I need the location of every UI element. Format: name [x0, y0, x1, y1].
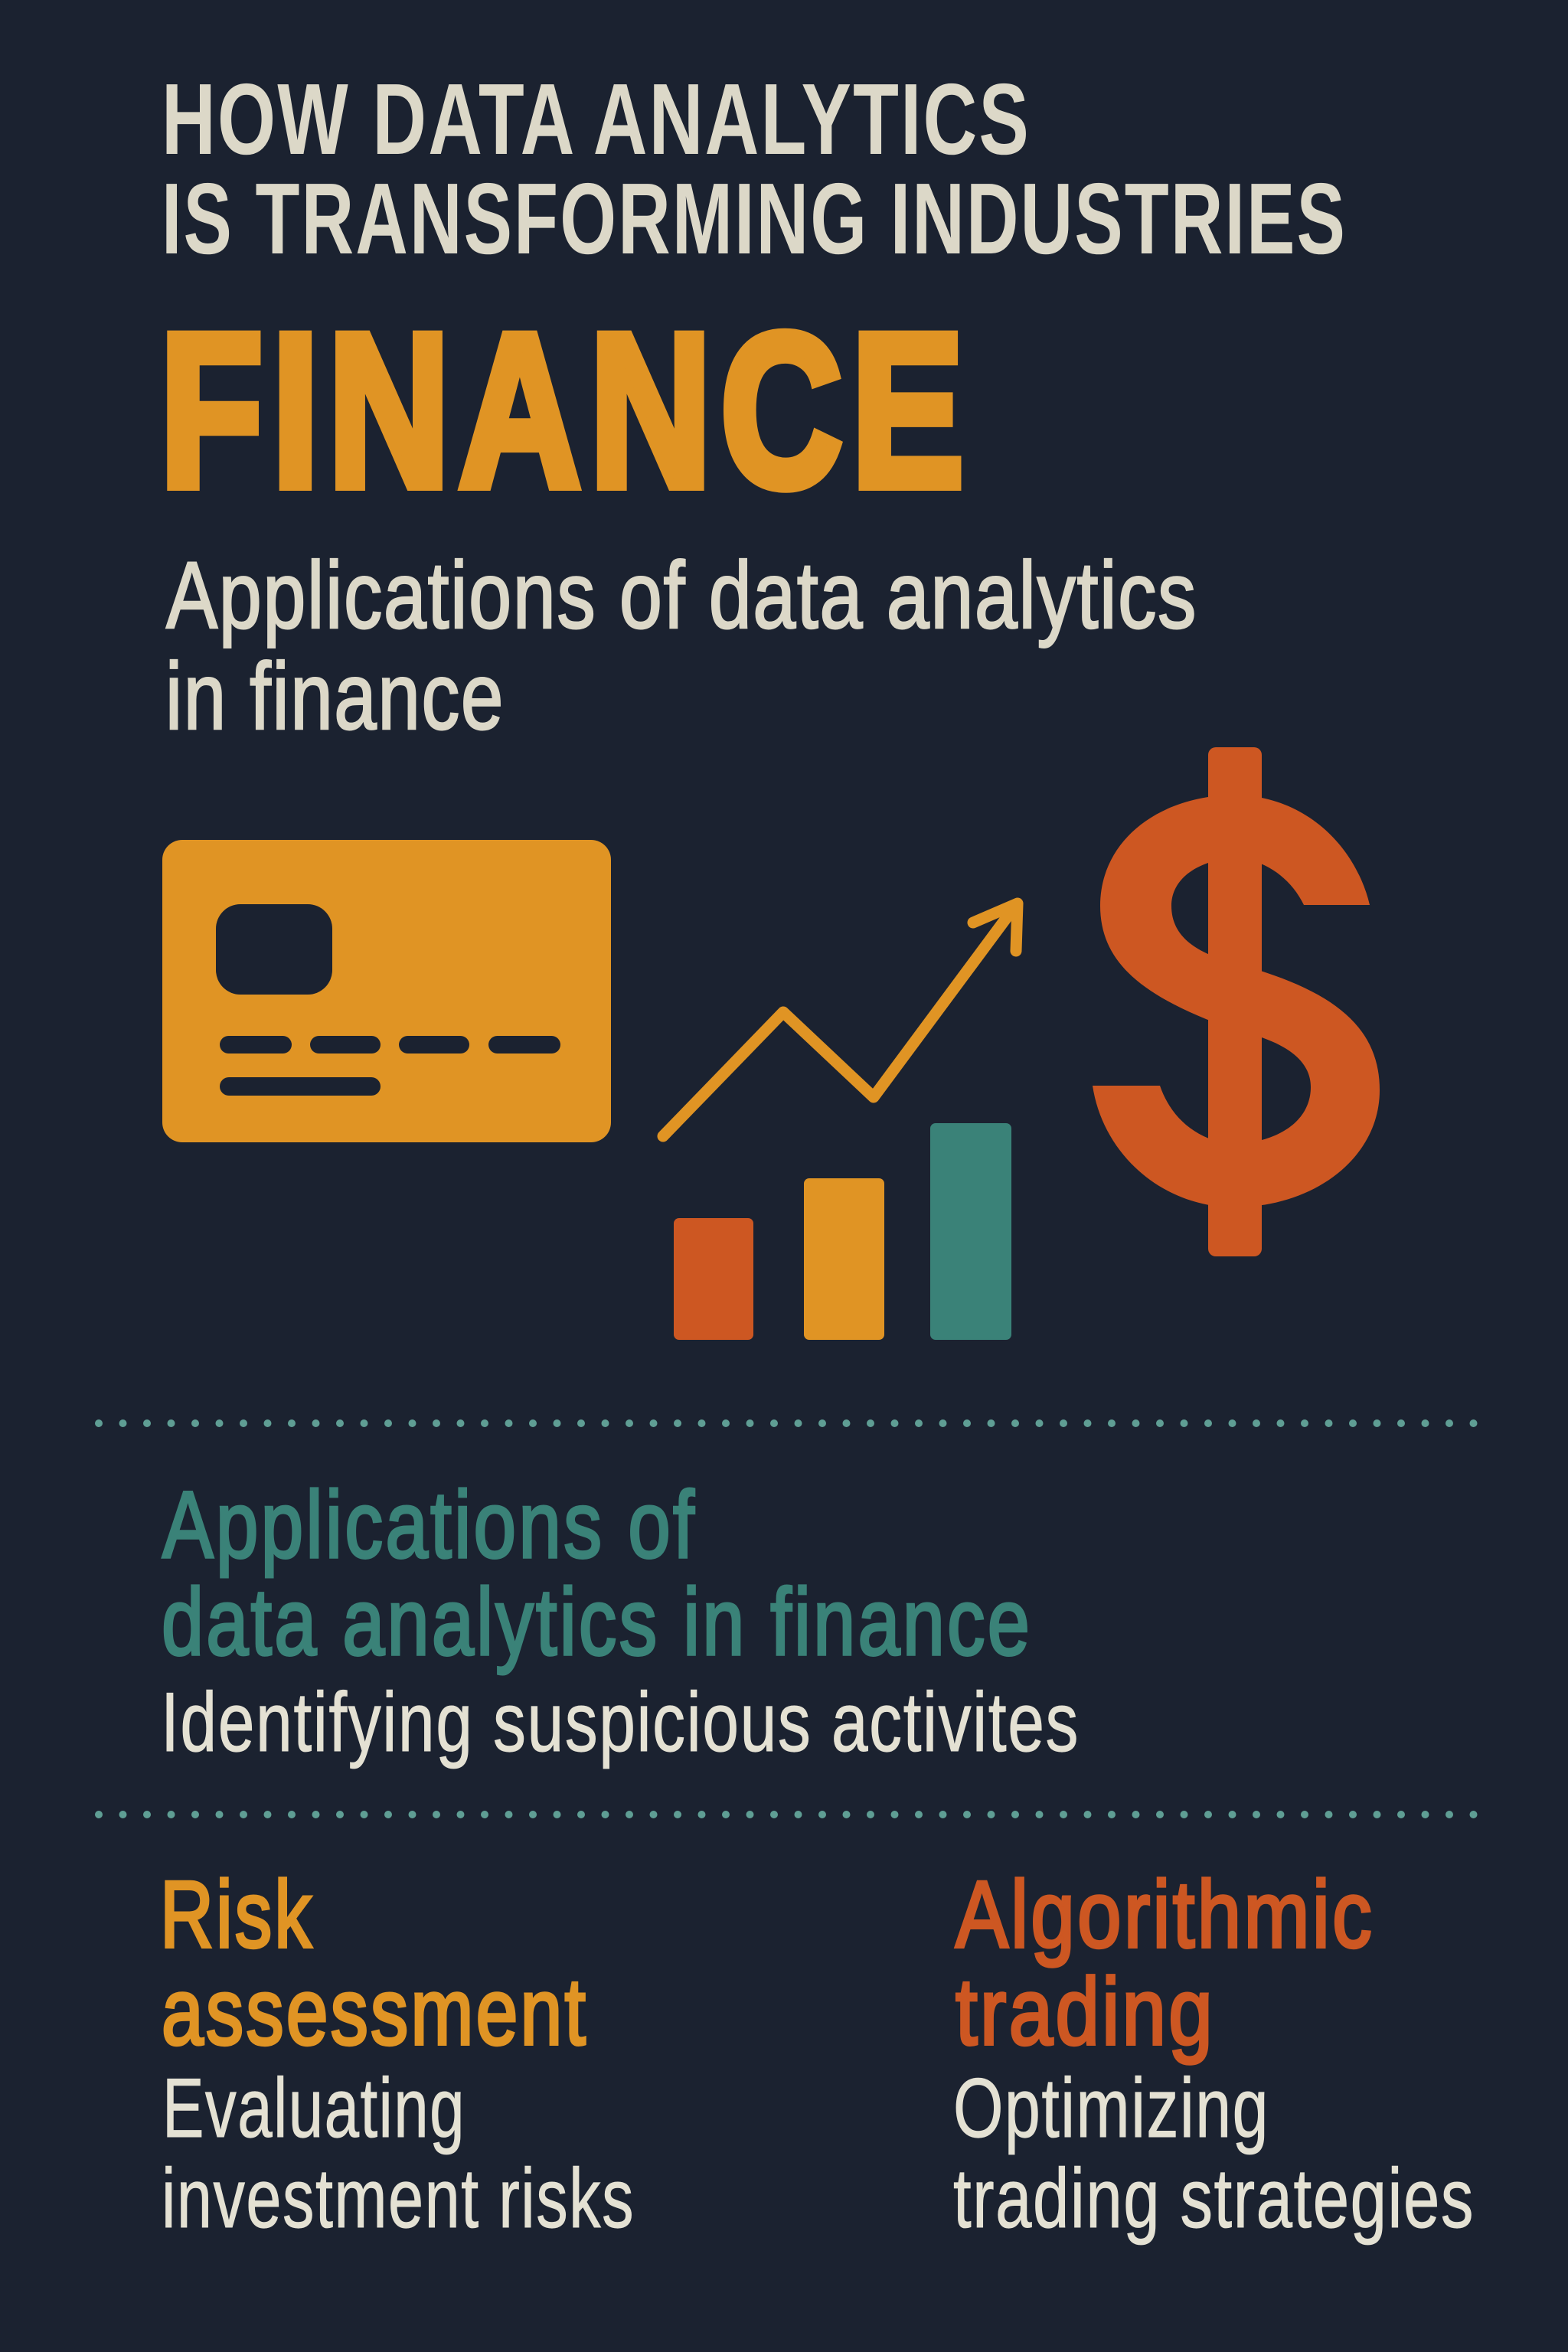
panel: algorithmic trading: trading	[956, 1959, 1215, 2065]
panel: risk assessment: investment risks	[162, 2151, 635, 2246]
icon: dollar sign	[1093, 747, 1380, 1256]
panel: algorithmic trading: Optimizing	[953, 2061, 1269, 2155]
panel: risk assessment: assessment	[162, 1959, 588, 2065]
subtitle: Applications of data analytics	[166, 543, 1197, 648]
section heading: applications: data analytics in finance	[162, 1570, 1032, 1675]
subtitle	[165, 543, 1197, 750]
panel: risk assessment: Evaluating	[162, 2061, 466, 2155]
panel: algorithmic trading: Algorithmic	[956, 1862, 1374, 1968]
text: identifying suspicious activities: Identifying suspicious activites	[161, 1675, 1080, 1769]
icon: credit card	[162, 840, 611, 1142]
heading: finance: FINANCE	[160, 289, 973, 532]
bar chart	[674, 1123, 1011, 1340]
title: HOW DATA ANALYTICS	[162, 63, 1031, 175]
panel: algorithmic trading	[953, 1862, 1475, 2246]
subtitle: in finance	[165, 644, 505, 750]
section heading: applications	[162, 1472, 1032, 1675]
icon: trend arrow	[663, 903, 1018, 1136]
panel: risk assessment	[160, 1862, 635, 2246]
panel: risk assessment: Risk	[160, 1862, 314, 1968]
section heading: applications: Applications of	[162, 1472, 697, 1578]
title	[162, 63, 1347, 275]
